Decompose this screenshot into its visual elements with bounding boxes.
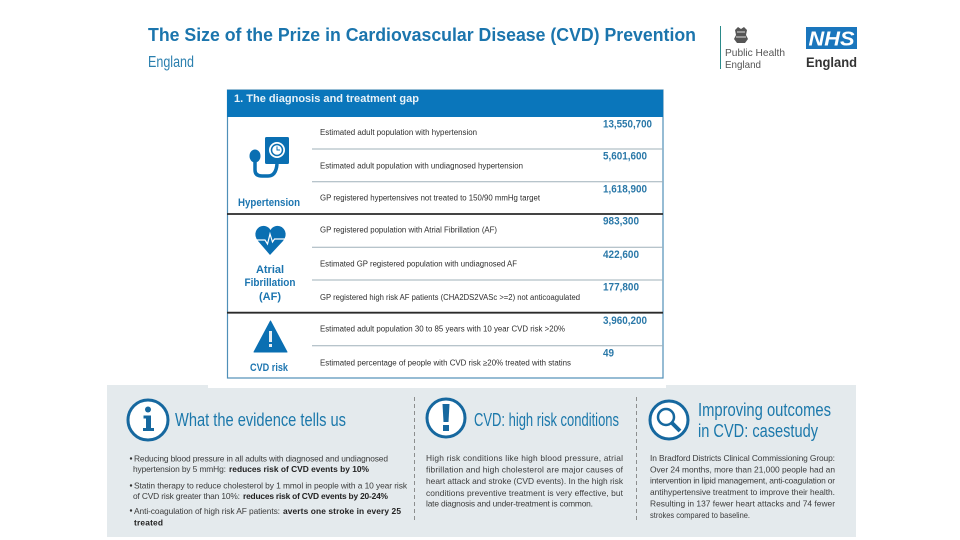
heading: Improving outcomes bbox=[698, 400, 831, 420]
subtitle: England: England bbox=[148, 54, 194, 71]
row: CVD risk population bbox=[320, 315, 647, 334]
icon: magnifying glass bbox=[650, 401, 688, 439]
row: undiagnosed hypertension: 5,601,600 bbox=[603, 151, 647, 163]
paragraph: conditions preventive treatment is very effective, but bbox=[426, 488, 624, 498]
paragraph: Resulting in 137 fewer heart attacks and 74 fewer bbox=[650, 499, 835, 509]
paragraph: heart attack and stroke (CVD events). In the high risk bbox=[426, 476, 624, 486]
row: AF population: 983,300 bbox=[603, 216, 639, 228]
bullet list: Statin therapy to reduce cholesterol by 1 mmol in people with a 10 year risk bbox=[134, 481, 408, 491]
bullet list bbox=[130, 454, 408, 528]
label: Atrial Fibrillation (AF): Atrial bbox=[256, 264, 284, 276]
row: undiagnosed AF bbox=[320, 249, 639, 269]
bullet list: averts one stroke in every 25 bbox=[283, 506, 401, 516]
logo: NHS England: NHS bbox=[808, 28, 855, 50]
row: undiagnosed hypertension bbox=[320, 151, 647, 170]
icon: warning triangle bbox=[254, 321, 287, 352]
row: hypertensives not treated bbox=[320, 184, 647, 203]
logo: Public Health England: England bbox=[725, 59, 761, 71]
heading: in CVD: casestudy bbox=[698, 421, 818, 441]
row: CVD risk population: Estimated adult population 30 to 85 years with 10 year CVD risk >20% bbox=[320, 325, 565, 334]
logo: NHS England bbox=[806, 27, 857, 70]
panel: evidence background bbox=[107, 385, 856, 537]
heading: CVD: high risk conditions bbox=[474, 410, 619, 430]
label: Atrial Fibrillation (AF): (AF) bbox=[259, 291, 281, 303]
icon: blood pressure cuff bbox=[250, 137, 289, 176]
bullet list: of CVD risk greater than 10%: bbox=[133, 491, 240, 501]
row: hypertension population: Estimated adult population with hypertension bbox=[320, 128, 477, 137]
paragraph: fibrillation and high cholesterol are major causes of bbox=[426, 464, 624, 474]
row: AF population bbox=[320, 216, 639, 235]
row: undiagnosed AF: Estimated GP registered population with undiagnosed AF bbox=[320, 260, 517, 269]
panel: diagnosis and treatment gap bbox=[227, 90, 663, 378]
row: not anticoagulated: 177,800 bbox=[603, 282, 639, 294]
icon: heart with pulse bbox=[255, 226, 286, 255]
paragraph: antihypertensive treatment to improve their health. bbox=[650, 487, 835, 497]
paragraph: strokes compared to baseline. bbox=[650, 510, 750, 520]
row: treated with statins: Estimated percentage of people with CVD risk ≥20% treated with statins bbox=[320, 359, 571, 368]
row: hypertensives not treated: 1,618,900 bbox=[603, 184, 647, 196]
label: CVD risk: CVD risk bbox=[250, 362, 289, 374]
row: AF population: GP registered population with Atrial Fibrillation (AF) bbox=[320, 226, 497, 235]
paragraph: Over 24 months, more than 21,000 people had an bbox=[650, 464, 835, 474]
row: undiagnosed AF: 422,600 bbox=[603, 249, 639, 261]
paragraph bbox=[650, 453, 835, 520]
paragraph: High risk conditions like high blood pressure, atrial bbox=[426, 453, 623, 463]
panel heading: 1. The diagnosis and treatment gap bbox=[234, 93, 419, 105]
panel: improving outcomes case study bbox=[650, 400, 835, 520]
bullet list: Anti-coagulation of high risk AF patients: bbox=[134, 506, 280, 516]
title: The Size of the Prize in Cardiovascular Disease (CVD) Prevention bbox=[148, 25, 696, 45]
row: undiagnosed hypertension: Estimated adult population with undiagnosed hypertension bbox=[320, 162, 523, 170]
row: hypertension population: 13,550,700 bbox=[603, 119, 652, 131]
row: hypertension population bbox=[320, 119, 652, 137]
logo: Public Health England bbox=[720, 26, 785, 71]
logo: Public Health England: Public Health bbox=[725, 47, 785, 59]
icon: info circle bbox=[128, 400, 168, 440]
row: treated with statins: 49 bbox=[603, 348, 614, 360]
label: Atrial Fibrillation (AF) bbox=[244, 264, 296, 303]
heading: What the evidence tells us bbox=[175, 410, 346, 430]
paragraph: intervention in lipid management, anti-coagulation or bbox=[650, 475, 835, 485]
label: Hypertension: Hypertension bbox=[238, 197, 300, 209]
paragraph bbox=[426, 453, 624, 509]
bullet list: treated bbox=[134, 518, 163, 528]
row: treated with statins bbox=[320, 348, 614, 368]
logo: NHS England: England bbox=[806, 54, 857, 70]
panel heading bbox=[227, 90, 663, 117]
row: hypertensives not treated: GP registered hypertensives not treated to 150/90 mmHg target bbox=[320, 194, 541, 203]
row: not anticoagulated bbox=[320, 282, 639, 302]
bullet list: reduces risk of CVD events by 10% bbox=[229, 464, 370, 474]
label: Atrial Fibrillation (AF): Fibrillation bbox=[244, 277, 296, 289]
row: CVD risk population: 3,960,200 bbox=[603, 315, 647, 327]
panel: CVD high risk conditions bbox=[426, 399, 624, 509]
heading bbox=[698, 400, 831, 441]
paragraph: In Bradford Districts Clinical Commissioning Group: bbox=[650, 453, 835, 463]
icon: exclamation circle bbox=[427, 399, 465, 437]
panel: what the evidence tells us bbox=[128, 400, 408, 528]
bullet list: reduces risk of CVD events by 20-24% bbox=[243, 491, 389, 501]
bullet list: hypertension by 5 mmHg: bbox=[133, 464, 226, 474]
row: not anticoagulated: GP registered high risk AF patients (CHA2DS2VASc >=2) not anticoagulated bbox=[320, 293, 580, 302]
bullet list: Reducing blood pressure in all adults with diagnosed and undiagnosed bbox=[134, 454, 388, 464]
paragraph: late diagnosis and under-treatment is common. bbox=[426, 499, 593, 509]
